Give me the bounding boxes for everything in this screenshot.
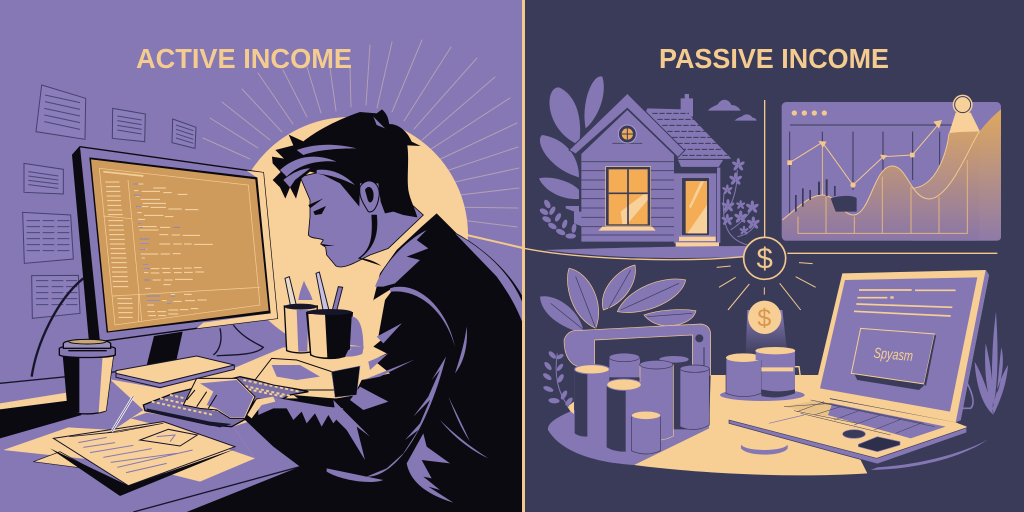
window sill xyxy=(598,227,656,231)
house xyxy=(569,93,731,252)
round attic window xyxy=(618,125,636,143)
lit window xyxy=(606,167,651,226)
small sprig xyxy=(542,350,574,407)
coin cylinders xyxy=(575,353,709,454)
screen xyxy=(820,277,977,412)
sun beam xyxy=(949,113,980,133)
screen button: Spyasm xyxy=(873,346,914,365)
papers on desk xyxy=(33,396,237,496)
front area xyxy=(782,132,979,241)
jacket highlights xyxy=(327,230,524,503)
front hand xyxy=(183,378,255,418)
heading: passive income: PASSIVE INCOME xyxy=(659,43,889,74)
coffee cup xyxy=(59,339,115,414)
wall xyxy=(581,110,674,242)
keyboard xyxy=(784,400,946,438)
hair xyxy=(272,109,421,217)
rays around dollar xyxy=(717,263,816,310)
left desk edge xyxy=(0,393,68,409)
monitor stand xyxy=(146,332,183,369)
shadow between keyboard and papers xyxy=(131,413,255,458)
chart panel xyxy=(782,102,1001,241)
chart grid xyxy=(790,125,957,213)
glowing coin: $ xyxy=(757,305,771,333)
facial features xyxy=(308,198,335,246)
cylinder right xyxy=(680,365,709,430)
coin glow xyxy=(746,310,787,353)
gable trim xyxy=(569,93,685,157)
ground xyxy=(544,246,747,258)
cylinder small xyxy=(631,411,661,454)
jaw shadow xyxy=(358,215,381,266)
clouds xyxy=(708,100,741,111)
connecting line left xyxy=(524,248,744,260)
vertical divider xyxy=(763,100,767,237)
keyboard xyxy=(143,377,308,427)
panel: active income xyxy=(0,0,524,512)
back cuff xyxy=(332,366,360,397)
glowing coin xyxy=(748,301,781,334)
sun disc behind the developer xyxy=(232,117,468,353)
small fern xyxy=(539,199,577,239)
window dots xyxy=(792,110,827,116)
shadow under back hand xyxy=(293,395,333,405)
dollar badge: $ xyxy=(757,243,773,276)
dollar badge xyxy=(744,237,786,279)
laptop stand xyxy=(959,383,973,408)
back hand xyxy=(255,358,335,390)
monitor xyxy=(73,147,277,342)
flat coin on table xyxy=(741,438,788,455)
ear xyxy=(360,181,379,212)
connecting line right xyxy=(787,251,997,255)
jacket xyxy=(187,213,523,512)
cylinder tall left xyxy=(575,365,609,437)
cylinder back right xyxy=(659,356,689,429)
developer xyxy=(183,109,524,512)
lid xyxy=(813,270,989,422)
cylinder middle xyxy=(640,360,673,440)
door steps xyxy=(671,237,723,252)
centre divider xyxy=(522,0,525,512)
heading: active income: ACTIVE INCOME xyxy=(136,43,352,74)
column frame xyxy=(798,160,967,233)
wall notes xyxy=(23,85,196,318)
screen with code xyxy=(91,159,269,331)
head xyxy=(272,109,423,267)
shrub beside porch xyxy=(721,158,760,245)
illustration: developer at desk xyxy=(0,85,524,512)
cylinder back left xyxy=(609,353,640,377)
face and neck xyxy=(300,167,423,267)
chimney xyxy=(681,94,693,117)
screen button xyxy=(851,328,936,390)
monitor base xyxy=(116,356,234,388)
front sleeve highlights xyxy=(258,397,343,427)
hair highlights xyxy=(280,117,385,187)
light falling on desk xyxy=(3,347,367,482)
house foliage xyxy=(539,76,604,227)
black device xyxy=(858,437,900,452)
table xyxy=(548,375,988,475)
porch xyxy=(674,159,724,243)
pen holders xyxy=(284,272,363,359)
sun rays xyxy=(203,40,523,248)
rear rising area xyxy=(912,109,1001,241)
screen text lines xyxy=(854,290,956,316)
line with arrows xyxy=(790,122,941,195)
cylinder front xyxy=(607,379,641,452)
desk surface xyxy=(0,345,370,512)
plant behind phone xyxy=(540,265,696,333)
monitor cables xyxy=(32,278,83,377)
candlesticks and small device xyxy=(795,179,857,212)
laptop base xyxy=(728,396,967,459)
illustration: house and chart row xyxy=(524,76,1001,279)
sun over chart xyxy=(953,95,973,115)
illustration: investments and laptop row xyxy=(540,263,1008,475)
oval mouse xyxy=(843,430,865,438)
phone xyxy=(564,324,711,375)
leaf veins xyxy=(551,270,692,330)
coin stacks behind laptop xyxy=(720,347,805,401)
panel: passive income xyxy=(524,0,1024,512)
laptop xyxy=(728,270,989,464)
shingled roof xyxy=(644,108,731,162)
grass at right xyxy=(975,312,1008,415)
